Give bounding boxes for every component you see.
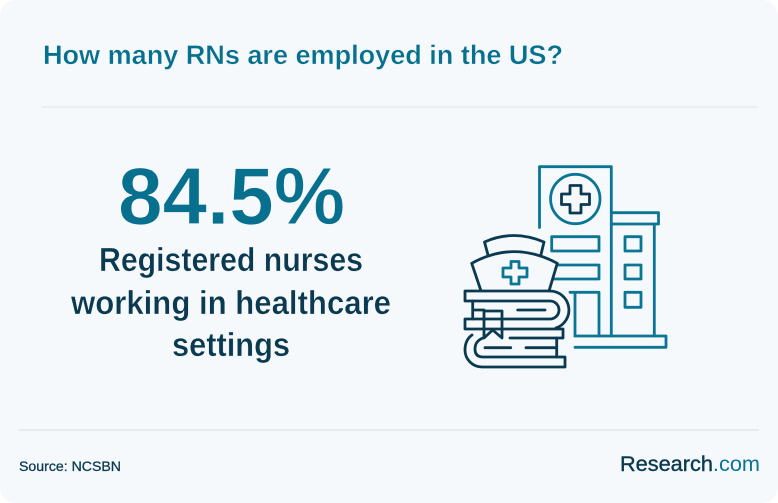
logo: Research.com: Research.com (620, 453, 760, 476)
icon: hospital, nurse cap and books (465, 167, 666, 367)
icon: hospital building (540, 167, 666, 347)
icon: medical cross on hospital (562, 186, 590, 213)
source note: Source: NCSBN (19, 459, 121, 474)
stat description: settings (172, 326, 290, 363)
title: How many RNs are employed in the US? (43, 40, 563, 70)
stat description: Registered nurses (99, 241, 363, 278)
stat description (70, 241, 391, 363)
icon: cap cross (503, 262, 527, 284)
icon: stack of books (465, 291, 569, 367)
big statistic: 84.5% (118, 152, 345, 242)
icon: nurse cap (472, 236, 557, 290)
stat description: working in healthcare (70, 284, 391, 321)
